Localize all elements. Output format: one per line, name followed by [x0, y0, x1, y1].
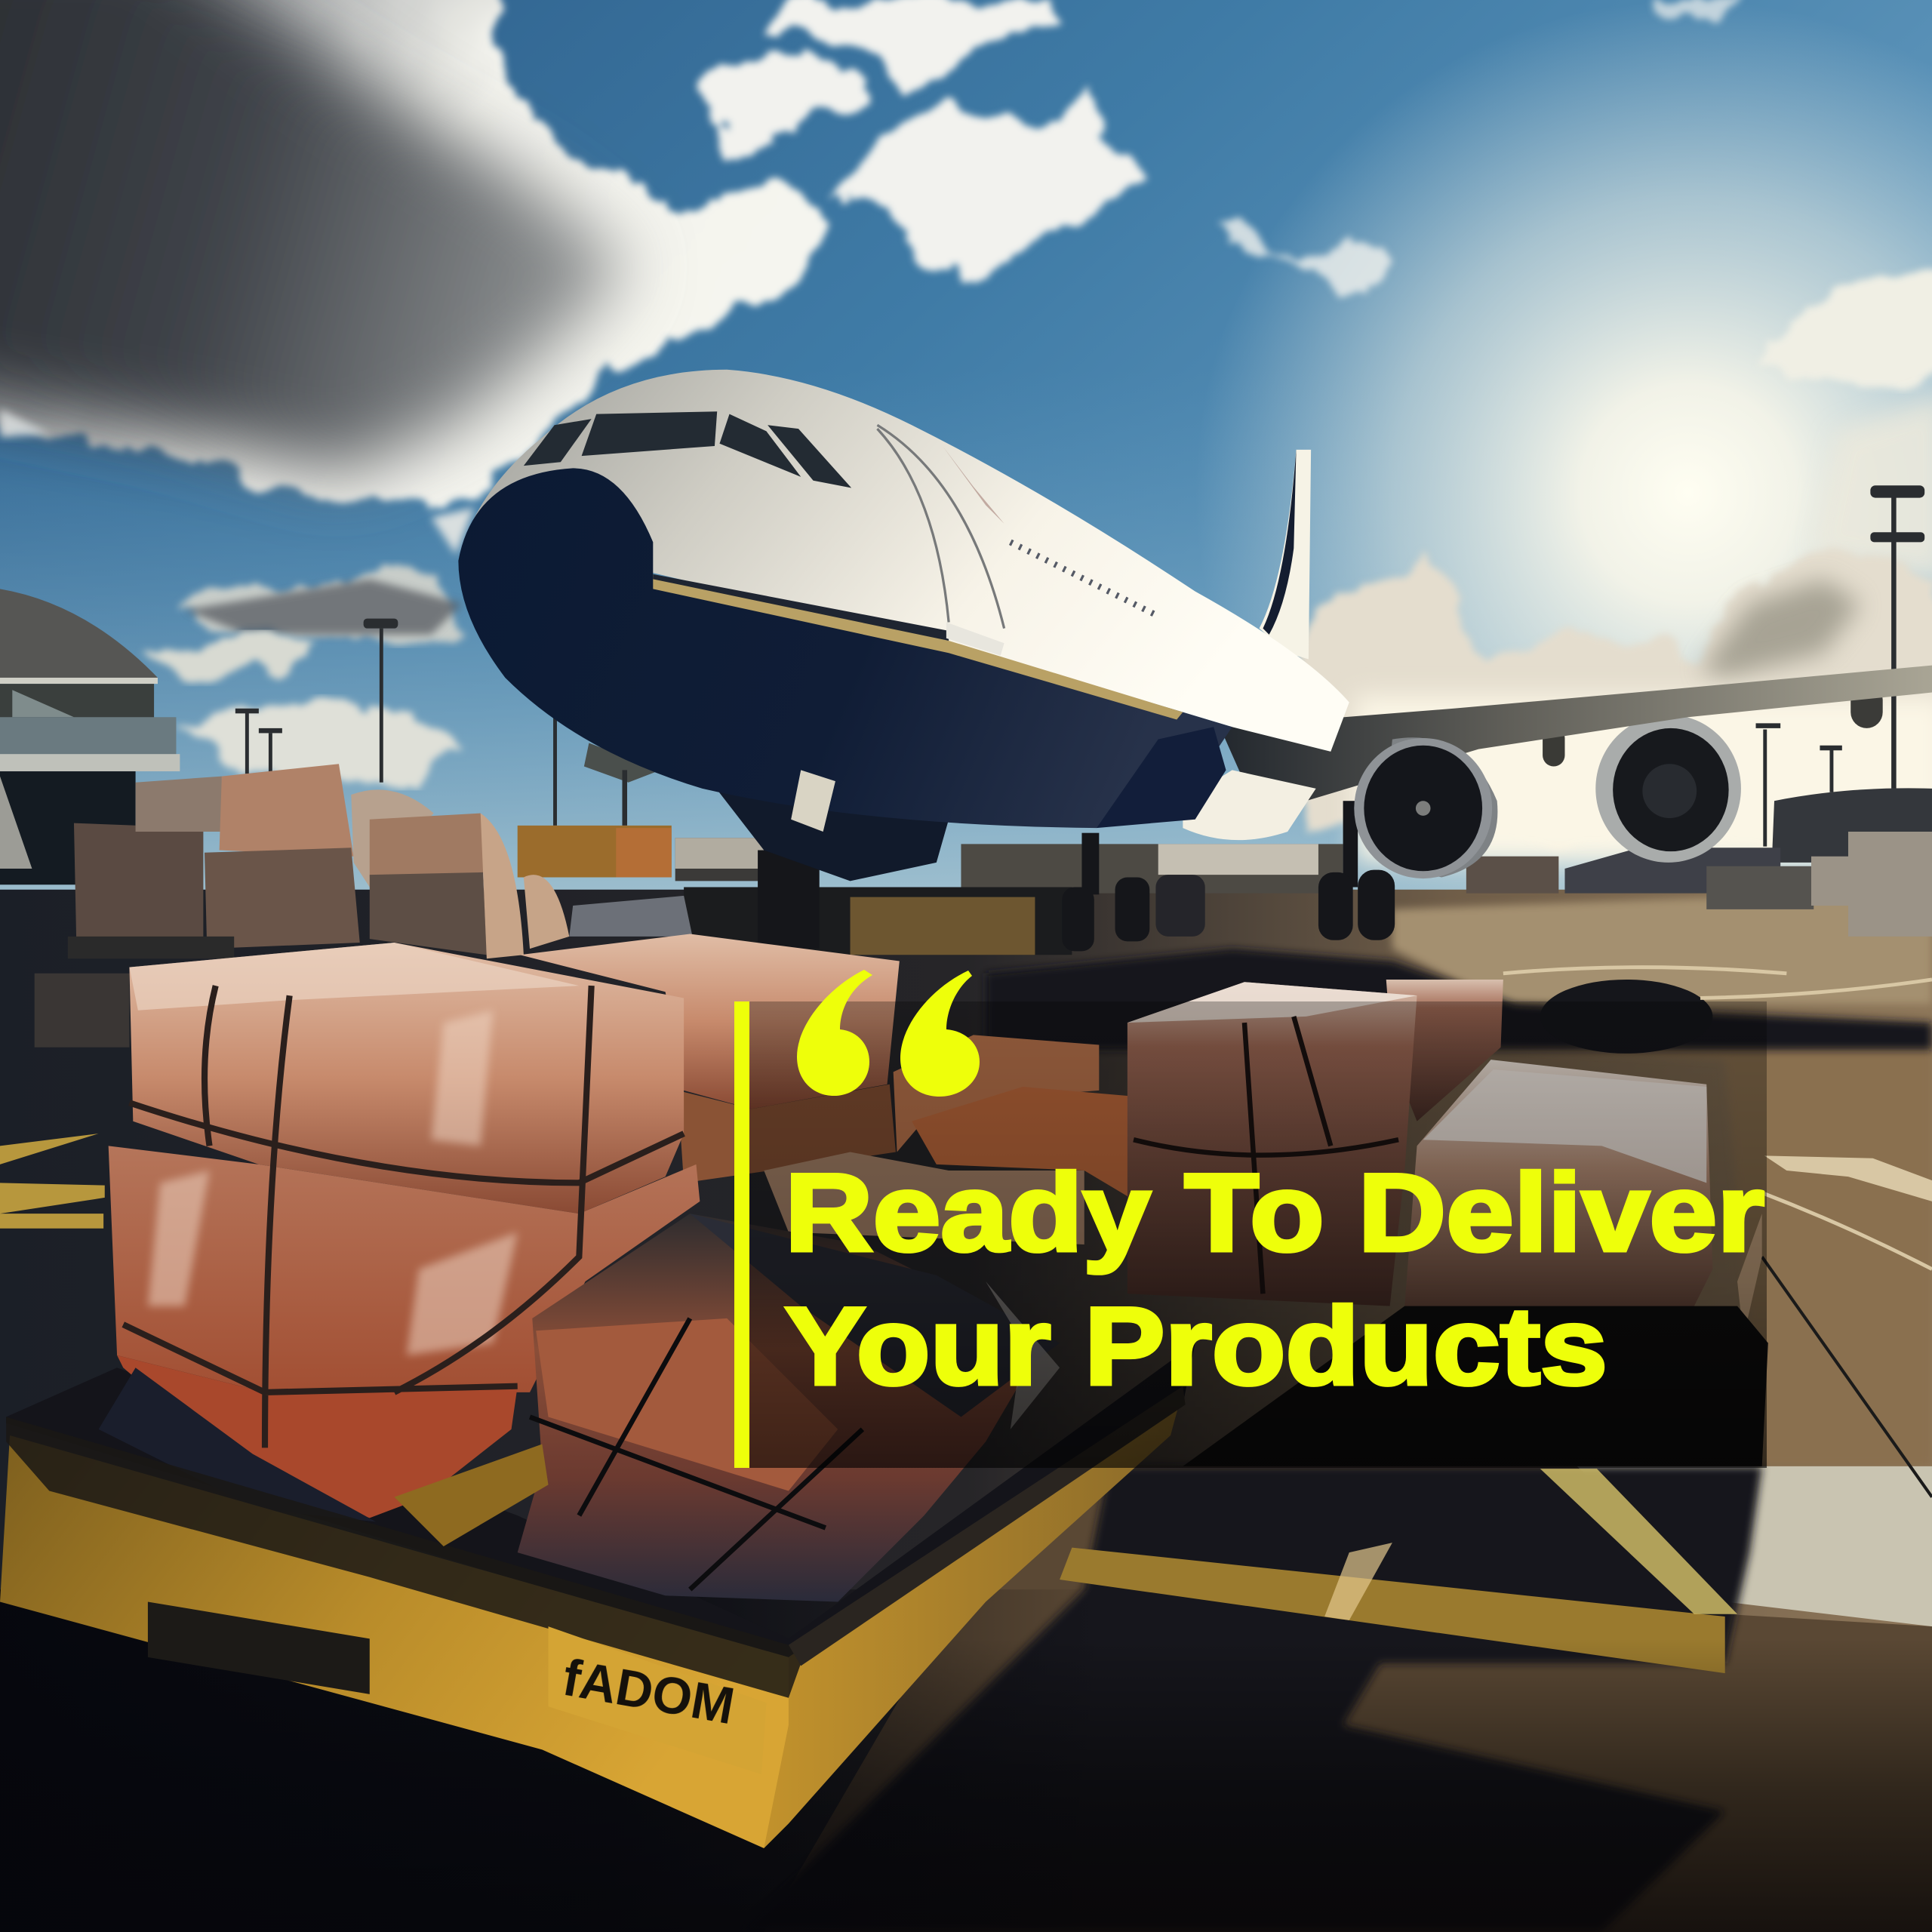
- fuselage underside: [458, 468, 1232, 828]
- title line 2: Your Products: [785, 1284, 1607, 1407]
- cart bed: [6, 1343, 1195, 1663]
- far engine: [1543, 684, 1883, 863]
- clouds: white upper clouds: [707, 0, 1756, 298]
- background vehicles and freight: [518, 788, 1932, 955]
- tail fin: [1260, 450, 1311, 659]
- wrapped dark bag: [518, 1214, 1060, 1601]
- cargo pile: large left stack: [99, 943, 700, 1521]
- title: [785, 1151, 1764, 1407]
- cart lettering: fADOM: [558, 1648, 739, 1735]
- translucent text panel: [749, 1001, 1767, 1468]
- title line 1: Ready To Deliver: [785, 1151, 1764, 1274]
- sky: [0, 0, 1932, 986]
- vertical accent bar: [734, 1001, 749, 1468]
- terminal building: [0, 589, 180, 884]
- apron ground: [0, 890, 1932, 1932]
- yellow cargo cart: [0, 1386, 1186, 1848]
- cargo pile: right stacks: [1128, 980, 1768, 1466]
- wing: [1220, 666, 1932, 801]
- cockpit windows: [524, 411, 851, 488]
- nose gear door: [791, 770, 835, 832]
- icon: quotation marks: [797, 970, 980, 1097]
- clouds: right and horizon clouds: [142, 265, 1932, 863]
- light poles: [235, 485, 1924, 847]
- near engine: [1354, 737, 1497, 878]
- fuselage upper: [458, 370, 1349, 752]
- landing gear: [705, 774, 1395, 951]
- door line and cabin windows: [877, 425, 1158, 656]
- cargo pile: rear centre stack: [520, 934, 1136, 1244]
- clouds: large dark cloud: [0, 0, 820, 512]
- background cargo boxes: [35, 764, 693, 1048]
- airplane: [458, 370, 1932, 951]
